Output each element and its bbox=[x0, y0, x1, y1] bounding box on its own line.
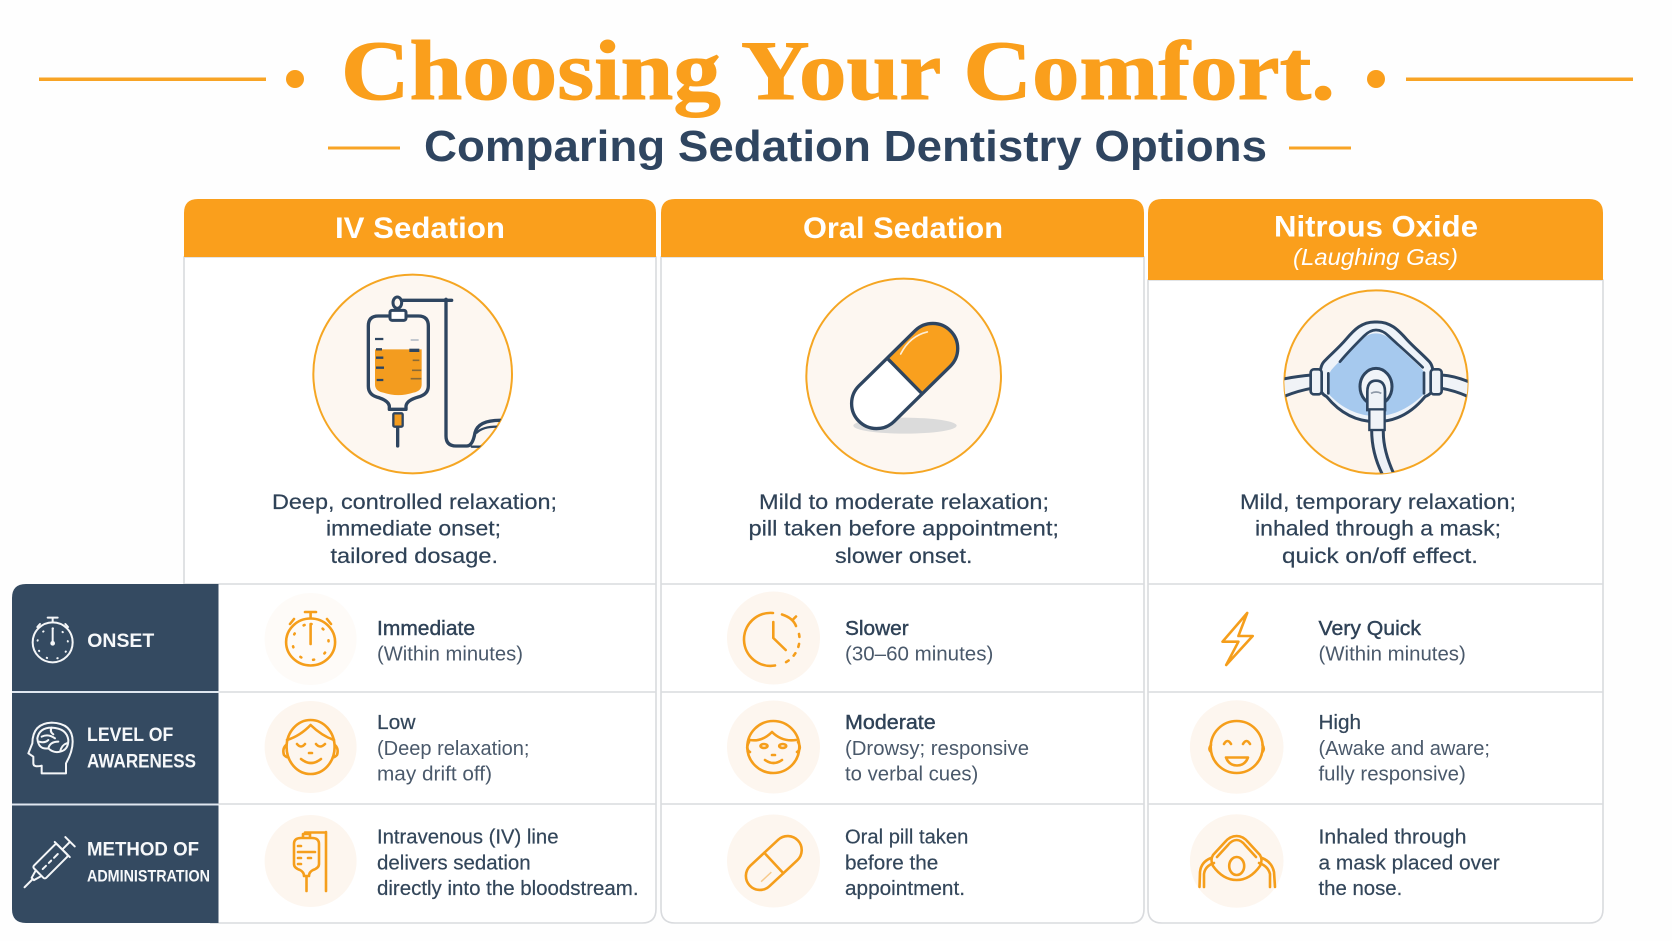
row: nitrous awareness bbox=[1190, 700, 1490, 794]
label: method of administration bbox=[17, 834, 210, 895]
row: nitrous method: a mask placed over bbox=[1318, 852, 1500, 874]
row: oral method: before the bbox=[845, 852, 938, 874]
row: nitrous awareness: fully responsive) bbox=[1318, 764, 1466, 786]
icon: white stopwatch bbox=[33, 618, 73, 662]
label: method of administration: METHOD OF bbox=[87, 839, 199, 861]
label: onset: ONSET bbox=[87, 630, 154, 652]
description: IV sedation: Deep, controlled relaxation; bbox=[272, 490, 557, 514]
row: nitrous awareness: High bbox=[1318, 712, 1361, 734]
icon: head with brain bbox=[28, 723, 73, 773]
row: oral awareness: Moderate bbox=[845, 712, 936, 734]
row: IV awareness bbox=[265, 701, 530, 793]
row: oral method: Oral pill taken bbox=[845, 827, 968, 849]
row: oral onset: (30–60 minutes) bbox=[845, 644, 993, 666]
description: oral sedation: slower onset. bbox=[835, 544, 972, 568]
icon: small capsule bbox=[740, 830, 807, 896]
row: nitrous method: Inhaled through bbox=[1318, 827, 1466, 849]
row: IV awareness: (Deep relaxation; bbox=[377, 738, 530, 760]
row: IV method: delivers sedation bbox=[377, 852, 531, 874]
icon: capsule pill bbox=[806, 279, 1001, 473]
row: oral method bbox=[727, 814, 968, 908]
description: oral sedation: pill taken before appointment; bbox=[748, 516, 1059, 540]
row: oral awareness bbox=[727, 700, 1029, 794]
header: nitrous oxide: Nitrous Oxide bbox=[1274, 210, 1478, 244]
icon: clock bbox=[744, 613, 799, 666]
row: IV method: Intravenous (IV) line bbox=[377, 827, 558, 849]
description: IV sedation: tailored dosage. bbox=[330, 544, 498, 568]
icon: relaxed face bbox=[283, 720, 338, 774]
header: IV sedation: IV Sedation bbox=[335, 212, 505, 245]
row: nitrous onset bbox=[1222, 613, 1466, 666]
row: IV onset: (Within minutes) bbox=[377, 644, 523, 666]
panel: row labels bbox=[12, 584, 218, 923]
row: IV method: directly into the bloodstream. bbox=[377, 878, 638, 900]
row: nitrous method bbox=[1190, 814, 1500, 908]
description: nitrous oxide: inhaled through a mask; bbox=[1255, 516, 1501, 540]
icon: lightning bolt bbox=[1222, 613, 1253, 665]
icon: drowsy face bbox=[747, 721, 800, 773]
row: nitrous awareness: (Awake and aware; bbox=[1318, 738, 1490, 760]
label: method of administration: ADMINISTRATION bbox=[87, 867, 210, 886]
description: nitrous oxide bbox=[1240, 490, 1516, 568]
row: oral onset: Slower bbox=[845, 618, 909, 640]
description: oral sedation bbox=[748, 490, 1059, 568]
header: IV sedation bbox=[184, 199, 656, 257]
panel: nitrous oxide column bbox=[1148, 199, 1603, 923]
icon: IV bag bbox=[313, 275, 512, 473]
row: IV onset: Immediate bbox=[377, 618, 475, 640]
row: oral method: appointment. bbox=[845, 878, 965, 900]
row: IV onset bbox=[265, 593, 523, 685]
label: level of awareness: LEVEL OF bbox=[87, 724, 173, 746]
header: nitrous oxide: (Laughing Gas) bbox=[1293, 244, 1458, 270]
description: nitrous oxide: Mild, temporary relaxation; bbox=[1240, 490, 1516, 514]
subtitle: Comparing Sedation Dentistry Options bbox=[424, 122, 1267, 171]
row: nitrous method: the nose. bbox=[1318, 878, 1402, 900]
row: IV awareness: may drift off) bbox=[377, 764, 492, 786]
label: level of awareness: AWARENESS bbox=[87, 751, 196, 773]
title: Choosing Your Comfort. bbox=[341, 24, 1335, 118]
row: nitrous onset: (Within minutes) bbox=[1318, 644, 1466, 666]
label: level of awareness bbox=[28, 723, 196, 773]
panel: IV sedation column bbox=[184, 199, 656, 923]
row: IV awareness: Low bbox=[377, 712, 416, 734]
description: IV sedation: immediate onset; bbox=[326, 516, 501, 540]
row: IV method bbox=[265, 815, 638, 907]
icon: stopwatch bbox=[286, 612, 335, 666]
row: oral awareness: (Drowsy; responsive bbox=[845, 738, 1029, 760]
row: oral onset bbox=[727, 592, 993, 684]
icon: awake face bbox=[1210, 721, 1264, 773]
description: IV sedation bbox=[272, 490, 557, 568]
panel: oral sedation column bbox=[661, 199, 1144, 923]
row: oral awareness: to verbal cues) bbox=[845, 764, 978, 786]
header: nitrous oxide bbox=[1148, 199, 1603, 280]
icon: small mask bbox=[1200, 836, 1275, 887]
description: nitrous oxide: quick on/off effect. bbox=[1282, 544, 1478, 568]
label: onset bbox=[33, 618, 154, 662]
title block bbox=[39, 24, 1633, 118]
header: oral sedation bbox=[661, 199, 1144, 257]
header: oral sedation: Oral Sedation bbox=[803, 212, 1003, 245]
icon: small IV bag bbox=[294, 832, 326, 891]
icon: syringe bbox=[17, 834, 78, 895]
row: nitrous onset: Very Quick bbox=[1318, 618, 1422, 640]
description: oral sedation: Mild to moderate relaxation; bbox=[759, 490, 1049, 514]
icon: nitrous mask bbox=[1283, 290, 1468, 475]
